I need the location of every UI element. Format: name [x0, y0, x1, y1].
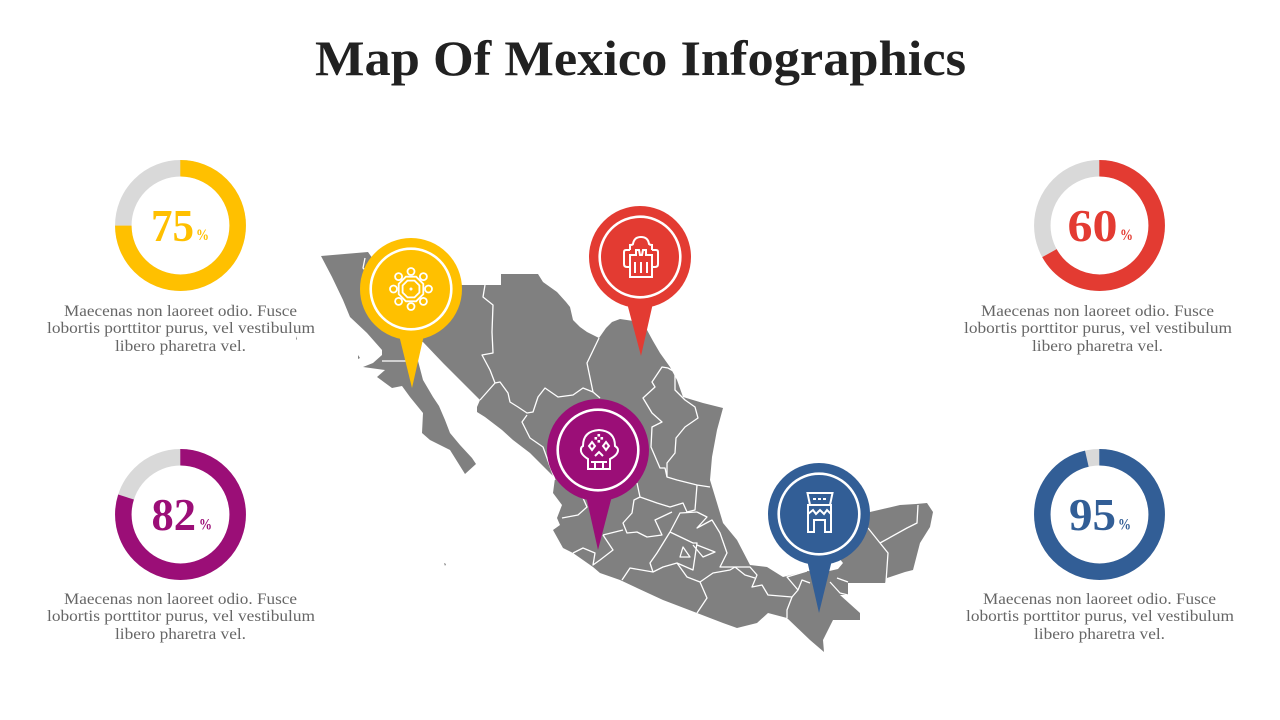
icon: woven bag	[624, 237, 658, 277]
panel: purple statistic	[47, 457, 316, 643]
text block: Maecenas non laoreet odio. Fusce	[983, 591, 1216, 608]
text block: libero pharetra vel.	[1034, 626, 1165, 643]
pin: blue	[768, 463, 870, 613]
text block	[47, 591, 316, 643]
value: 95%: 95	[1069, 489, 1116, 540]
text block	[964, 303, 1233, 355]
pin: red	[589, 206, 691, 356]
panel: blue statistic	[966, 457, 1235, 643]
text block: lobortis porttitor purus, vel vestibulum	[47, 608, 316, 625]
text block: Maecenas non laoreet odio. Fusce	[64, 591, 297, 608]
text block: lobortis porttitor purus, vel vestibulum	[47, 320, 316, 337]
value: 82%: %	[199, 516, 212, 534]
icon: sugar skull	[581, 430, 618, 469]
text block: lobortis porttitor purus, vel vestibulum	[964, 320, 1233, 337]
text block: Maecenas non laoreet odio. Fusce	[981, 303, 1214, 320]
text block: libero pharetra vel.	[1032, 338, 1163, 355]
pin: purple	[547, 399, 649, 550]
text block: libero pharetra vel.	[115, 338, 246, 355]
value: 60%: 60	[1068, 200, 1118, 251]
donut chart: 75%	[123, 168, 238, 283]
text block	[966, 591, 1235, 643]
text block: Maecenas non laoreet odio. Fusce	[64, 303, 297, 320]
pin: yellow	[360, 238, 462, 388]
value: 95%: %	[1118, 516, 1131, 534]
value: 75%: 75	[151, 200, 194, 251]
panel: red statistic	[964, 168, 1233, 355]
text block: lobortis porttitor purus, vel vestibulum	[966, 608, 1235, 625]
panel: yellow statistic	[47, 168, 316, 355]
text block: libero pharetra vel.	[115, 626, 246, 643]
value: 82%: 82	[152, 489, 196, 540]
value: 60%: %	[1120, 227, 1133, 244]
icon: totem	[808, 493, 832, 532]
title: Map Of Mexico Infographics	[315, 30, 966, 86]
map of Mexico	[296, 252, 933, 652]
text block	[47, 303, 316, 355]
value: 75%: %	[196, 227, 209, 244]
donut chart: 60%	[1042, 168, 1157, 283]
donut chart: 82%	[123, 457, 238, 572]
donut chart: 95%	[1042, 457, 1157, 572]
icon: sun ornament	[390, 268, 432, 310]
